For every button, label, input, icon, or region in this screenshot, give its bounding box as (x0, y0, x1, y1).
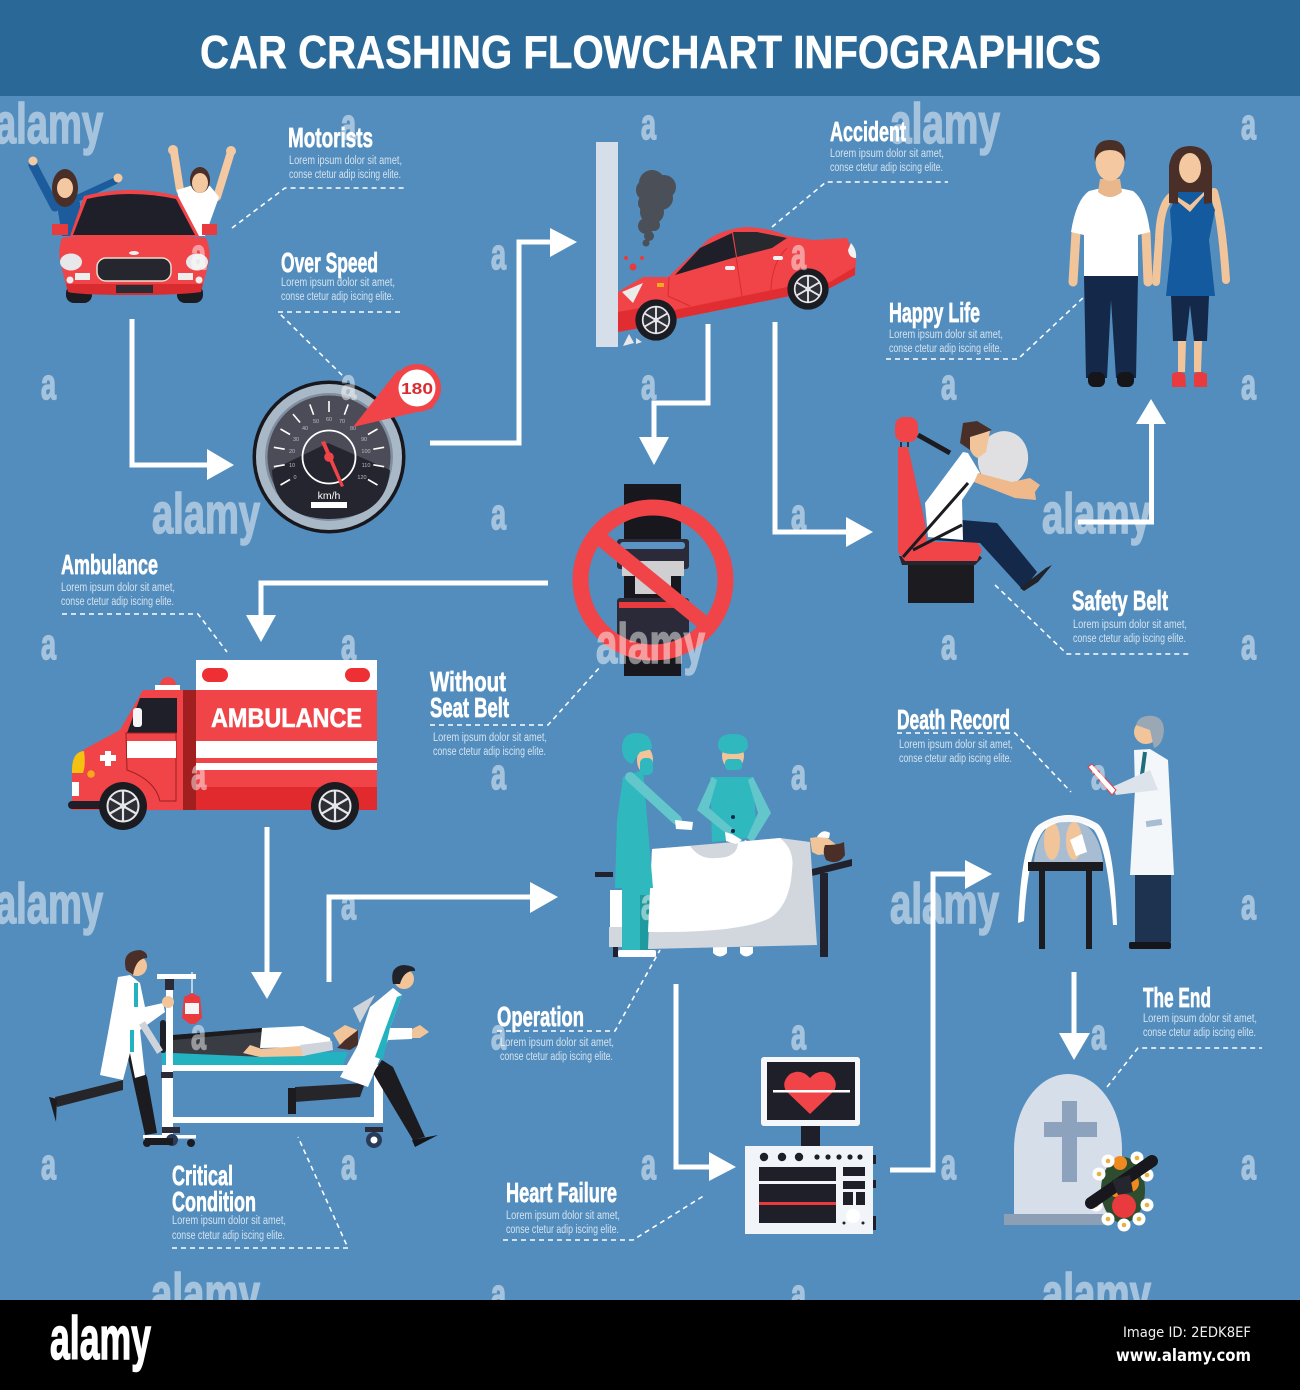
watermark: repeating alamy marks: a (1241, 100, 1256, 149)
label: Heart Failure (503, 1177, 705, 1240)
label: Motorists: Motorists (288, 122, 373, 153)
arrow: no seat belt to ambulance (246, 583, 548, 642)
icon: speedometer showing 180: 50 (313, 419, 319, 425)
watermark: repeating alamy marks: a (491, 230, 506, 279)
watermark: repeating alamy marks: a (791, 1270, 806, 1319)
label: Critical Condition: Critical (172, 1160, 233, 1191)
watermark: repeating alamy marks: a (791, 1010, 806, 1059)
watermark: repeating alamy marks: a (1241, 880, 1256, 929)
watermark: repeating alamy marks: a (941, 1140, 956, 1189)
label: Accident (772, 116, 948, 227)
arrow: over speed to accident (430, 228, 577, 443)
arrow: operation to heart failure (676, 984, 736, 1181)
icon: gravestone with wreath (1004, 1074, 1154, 1232)
label: Safety Belt: Lorem ipsum dolor sit amet, (1073, 619, 1187, 631)
label: Safety Belt (995, 585, 1191, 654)
icon: happy couple (1071, 140, 1226, 387)
label: Death Record: conse ctetur adip iscing elite. (899, 753, 1012, 765)
label: Without Seat Belt: Seat Belt (430, 692, 509, 723)
watermark: repeating alamy marks: a (491, 1010, 506, 1059)
watermark: repeating alamy marks: a (791, 230, 806, 279)
icon: speedometer showing 180: 100 (361, 449, 371, 455)
watermark: repeating alamy marks: alamy (890, 872, 999, 936)
watermark: repeating alamy marks: a (1241, 1140, 1256, 1189)
label: Death Record: Death Record (897, 704, 1010, 735)
icon: car crashing into wall (596, 142, 856, 347)
icon: speedometer showing 180: 20 (289, 449, 295, 455)
watermark: repeating alamy marks: a (341, 620, 356, 669)
icon: driver with airbag and safety belt (895, 417, 1052, 603)
arrow: safety belt to happy life (1078, 399, 1166, 522)
label: Safety Belt: Safety Belt (1072, 585, 1168, 616)
watermark: repeating alamy marks: a (641, 880, 656, 929)
label: Without Seat Belt: conse ctetur adip iscing elite. (433, 746, 546, 758)
label: Heart Failure: conse ctetur adip iscing elite. (506, 1224, 619, 1236)
watermark: repeating alamy marks: a (1091, 750, 1106, 799)
icon: speedometer showing 180: km/h (318, 490, 341, 502)
label: Over Speed: Lorem ipsum dolor sit amet, (281, 277, 395, 289)
watermark: repeating alamy marks: a (641, 360, 656, 409)
arrow: ambulance to critical condition (251, 827, 282, 999)
label: Ambulance (61, 549, 227, 652)
icon: ambulance (68, 660, 377, 830)
icon: doctors rushing patient on stretcher (49, 950, 438, 1148)
label: The End: conse ctetur adip iscing elite. (1143, 1027, 1256, 1039)
label: Safety Belt: conse ctetur adip iscing elite. (1073, 633, 1186, 645)
watermark: repeating alamy marks: a (1091, 230, 1106, 279)
icon: motorists in red car (28, 145, 236, 303)
watermark: repeating alamy marks: a (41, 360, 56, 409)
watermark: repeating alamy marks: a (491, 750, 506, 799)
label: Critical Condition (172, 1137, 348, 1248)
watermark: repeating alamy marks: a (341, 880, 356, 929)
footer bar: Image ID: 2EDK8EF (1123, 1325, 1251, 1341)
icon: speedometer showing 180: 70 (339, 419, 345, 425)
label: Happy Life: Happy Life (889, 297, 980, 328)
title: CAR CRASHING FLOWCHART INFOGRAPHICS (200, 26, 1101, 78)
icon: speedometer showing 180: 180 (401, 381, 433, 398)
icon: speedometer showing 180 (252, 364, 441, 534)
icon: speedometer showing 180: 0 (293, 475, 297, 481)
label: Operation: conse ctetur adip iscing elite. (500, 1051, 613, 1063)
watermark: repeating alamy marks: a (791, 750, 806, 799)
label: The End: Lorem ipsum dolor sit amet, (1143, 1013, 1257, 1025)
header band (0, 0, 1300, 96)
watermark: repeating alamy marks: alamy (596, 612, 705, 676)
arrow: crash to no seat belt (639, 324, 708, 465)
label: Operation: Operation (497, 1001, 584, 1032)
label: The End (1107, 982, 1262, 1087)
label: Ambulance: Lorem ipsum dolor sit amet, (61, 582, 175, 594)
arrow: heart failure to death record (890, 860, 992, 1170)
watermark: repeating alamy marks: a (491, 1270, 506, 1319)
watermark: repeating alamy marks: alamy (152, 482, 260, 546)
label: Without Seat Belt: Without (430, 666, 506, 697)
watermark: repeating alamy marks: alamy (1042, 482, 1151, 546)
watermark: repeating alamy marks: alamy (1042, 1262, 1151, 1326)
label: Heart Failure: Heart Failure (506, 1177, 617, 1208)
watermark: repeating alamy marks: a (641, 100, 656, 149)
watermark: repeating alamy marks: a (941, 360, 956, 409)
footer bar (0, 1300, 1300, 1390)
label: Over Speed (278, 247, 400, 378)
arrow: crash to safety belt (775, 322, 873, 547)
label: Motorists (232, 122, 407, 228)
icon: heart monitor (745, 1057, 876, 1234)
label: Death Record: Lorem ipsum dolor sit amet, (899, 739, 1013, 751)
label: Happy Life: conse ctetur adip iscing elite. (889, 343, 1002, 355)
label: Operation (497, 950, 660, 1063)
icon: speedometer showing 180: 10 (289, 463, 295, 469)
icon: no seat belt sign (580, 484, 726, 676)
label: Critical Condition: Condition (172, 1186, 256, 1217)
watermark: repeating alamy marks: a (641, 1140, 656, 1189)
label: Without Seat Belt: Lorem ipsum dolor sit amet, (433, 732, 547, 744)
watermark: repeating alamy marks: alamy (890, 92, 1000, 156)
icon: speedometer showing 180: 30 (293, 437, 299, 443)
label: Happy Life (886, 296, 1085, 359)
label: Over Speed: conse ctetur adip iscing elite. (281, 291, 394, 303)
icon: speedometer showing 180: 120 (357, 475, 367, 481)
watermark: repeating alamy marks: a (791, 490, 806, 539)
watermark: repeating alamy marks: a (41, 620, 56, 669)
watermark: repeating alamy marks: a (1091, 1010, 1106, 1059)
watermark: repeating alamy marks: a (341, 100, 356, 149)
watermark: repeating alamy marks: a (341, 1140, 356, 1189)
icon: speedometer showing 180: 110 (362, 463, 370, 469)
watermark: repeating alamy marks: a (1241, 620, 1256, 669)
arrow: critical condition to operation (329, 882, 558, 982)
icon: speedometer showing 180: 40 (302, 426, 308, 432)
watermark: repeating alamy marks: a (191, 230, 206, 279)
icon: speedometer showing 180: 80 (350, 426, 356, 432)
label: Operation: Lorem ipsum dolor sit amet, (500, 1037, 614, 1049)
label: Heart Failure: Lorem ipsum dolor sit amet, (506, 1210, 620, 1222)
watermark: repeating alamy marks: a (191, 750, 206, 799)
icon: speedometer showing 180: 90 (361, 437, 367, 443)
icon: speedometer showing 180: 60 (326, 417, 332, 423)
label: Over Speed: Over Speed (281, 247, 378, 278)
watermark: repeating alamy marks: a (1241, 360, 1256, 409)
label: Motorists: Lorem ipsum dolor sit amet, (289, 155, 402, 167)
watermark: repeating alamy marks: alamy (151, 1262, 260, 1326)
watermark: repeating alamy marks: a (191, 1010, 206, 1059)
label: Motorists: conse ctetur adip iscing elite. (289, 169, 401, 181)
icon: doctor recording death (1018, 716, 1174, 949)
label: Ambulance: conse ctetur adip iscing elite. (61, 596, 174, 608)
label: Without Seat Belt (430, 666, 600, 758)
arrow: motorists to over speed (132, 319, 234, 480)
label: Accident: conse ctetur adip iscing elite. (830, 162, 943, 174)
label: Accident: Accident (830, 116, 906, 147)
footer bar: www.alamy.com (1116, 1346, 1251, 1365)
watermark: repeating alamy marks: a (341, 360, 356, 409)
icon: ambulance: AMBULANCE (211, 703, 362, 733)
label: Critical Condition: conse ctetur adip iscing elite. (172, 1230, 285, 1242)
icon: surgeons operating (595, 733, 852, 957)
label: Ambulance: Ambulance (61, 549, 158, 580)
label: Critical Condition: Lorem ipsum dolor sit amet, (172, 1215, 286, 1227)
watermark: repeating alamy marks: a (41, 1140, 56, 1189)
watermark: repeating alamy marks: a (491, 490, 506, 539)
footer bar: alamy (50, 1305, 151, 1372)
label: Happy Life: Lorem ipsum dolor sit amet, (889, 329, 1003, 341)
label: Death Record (897, 704, 1071, 792)
watermark: repeating alamy marks: a (941, 620, 956, 669)
label: The End: The End (1143, 982, 1211, 1013)
arrow: death record to the end (1059, 972, 1090, 1060)
label: Accident: Lorem ipsum dolor sit amet, (830, 148, 944, 160)
